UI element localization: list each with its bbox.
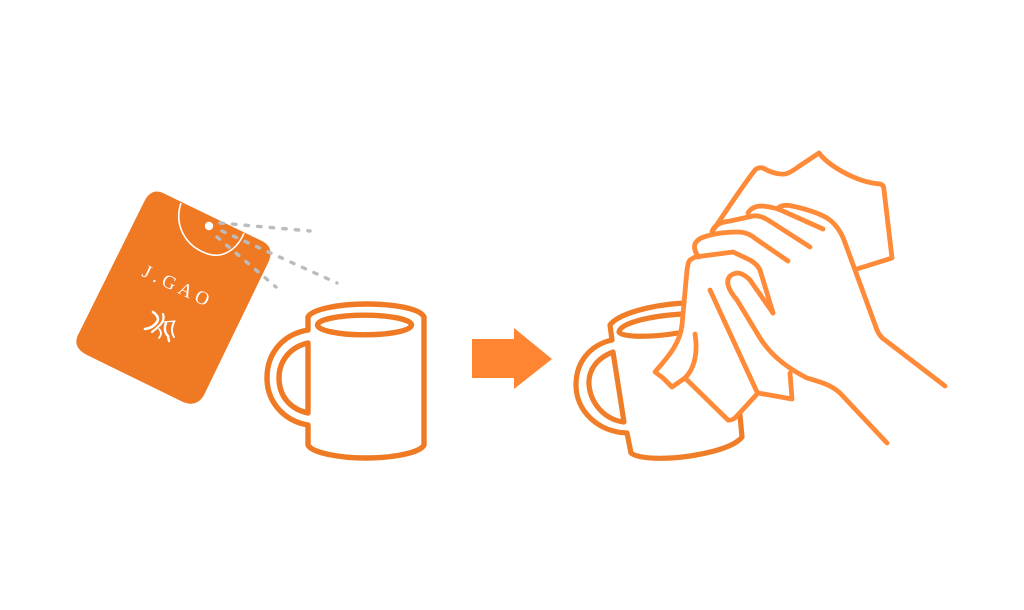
fingers — [712, 216, 810, 247]
wiped mug inner handle — [589, 352, 624, 422]
card body — [76, 192, 271, 404]
icon: hand holding cloth — [655, 153, 945, 443]
card nozzle hole — [205, 222, 213, 230]
cloth front — [655, 260, 792, 420]
arrow — [472, 328, 552, 389]
cloth fold — [685, 334, 696, 378]
icon: mug being wiped — [576, 303, 742, 458]
wiped mug rim and handle — [576, 303, 742, 458]
card nozzle arc — [179, 203, 244, 255]
mug opening — [318, 315, 412, 335]
cloth crease line — [710, 290, 757, 392]
cloth behind hand — [712, 153, 892, 269]
spray mist dotted lines — [217, 223, 337, 287]
mug inner handle — [279, 343, 308, 413]
wiped mug opening — [619, 314, 682, 336]
mug body and handle outline — [267, 304, 424, 458]
brand name: J.GAO — [139, 261, 217, 313]
icon: mug before wiping — [267, 304, 424, 458]
panel: perfume spray card — [76, 192, 271, 404]
brand logo — [145, 312, 175, 341]
